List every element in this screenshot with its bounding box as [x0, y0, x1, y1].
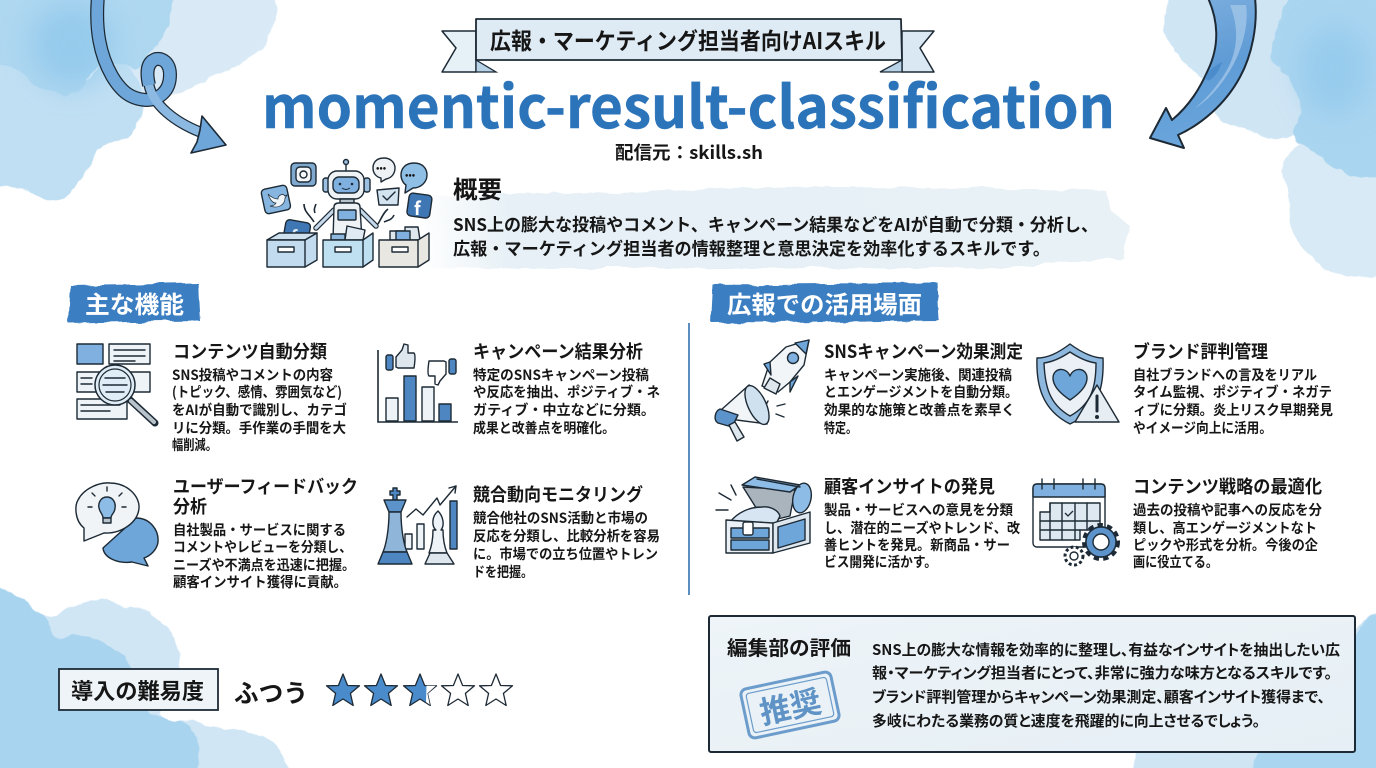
icon: robot sorting social media into boxes [261, 158, 432, 267]
review heading: 編集部の評価 [727, 632, 851, 661]
use case text: 効果的な施策と改善点を素早く [824, 400, 1015, 420]
icon: calendar with gears [1033, 479, 1117, 565]
overview text [453, 212, 1098, 261]
feature text: コメントやレビューを分類し、 [173, 537, 352, 557]
feature text [473, 508, 660, 582]
source line: 配信元：skills.sh [615, 139, 763, 165]
use case title: ブランド評判管理 [1133, 338, 1268, 364]
star rating [326, 674, 512, 706]
feature: content classification [77, 338, 347, 455]
feature text: リに分類。手作業の手間を大 [172, 418, 346, 438]
ribbon banner [442, 19, 934, 72]
feature text: SNS投稿やコメントの内容 [172, 365, 333, 385]
feature text: ニーズや不満点を迅速に把握。 [173, 555, 355, 575]
feature title: コンテンツ自動分類 [173, 338, 327, 364]
feature text: に。市場での立ち位置やトレン [473, 544, 658, 564]
use case text: 自社ブランドへの言及をリアル [1133, 365, 1317, 385]
icon: chess pieces and rising chart [378, 486, 457, 564]
feature text: 特定のSNSキャンペーン投稿 [473, 365, 649, 385]
use case text: ピックや形式を分析。今後の企 [1133, 535, 1318, 555]
use case title: コンテンツ戦略の最適化 [1133, 473, 1322, 499]
panel: overview [261, 158, 1130, 268]
review text: 多岐にわたる業務の質と速度を飛躍的に向上させるでしょう。 [872, 710, 1260, 731]
use case text: ィブに分類。炎上リスク早期発見 [1133, 400, 1333, 420]
use case text: 類し、高エンゲージメントなト [1133, 518, 1317, 538]
icon: shield with heart and warning [1037, 344, 1119, 424]
feature text: をAIが自動で識別し、カテゴ [172, 400, 347, 420]
icon: treasure chest [716, 477, 814, 553]
review text [872, 639, 1340, 731]
feature title: ユーザーフィードバック [173, 473, 358, 499]
panel: editorial review [709, 616, 1355, 752]
use case text: やイメージ向上に活用。 [1133, 418, 1272, 438]
review box [709, 616, 1355, 752]
feature text: 反応を分類し、比較分析を容易 [473, 526, 660, 546]
feature text: 成果と改善点を明確化。 [473, 418, 615, 438]
icon: magnifier over documents [77, 344, 155, 423]
use case text: タイム監視、ポジティブ・ネガテ [1133, 382, 1332, 402]
feature title: 分析 [173, 493, 207, 519]
panel: main features [68, 283, 660, 592]
feature text: 顧客インサイト獲得に貢献。 [173, 572, 347, 592]
feature: user feedback [76, 473, 358, 592]
ribbon banner: 広報・マーケティング担当者向けAIスキル [490, 22, 886, 56]
use case: campaign measurement [715, 338, 1023, 441]
arrow: top right curve [1150, 0, 1256, 148]
review text: SNS上の膨大な情報を効率的に整理し、有益なインサイトを抽出したい広 [872, 639, 1340, 660]
panel: PR use cases [711, 283, 1333, 572]
icon: robot sorting social media into boxes: f [291, 223, 298, 248]
feature title [173, 473, 358, 519]
icon: robot sorting social media into boxes: f [414, 195, 422, 221]
use case: brand reputation [1037, 338, 1333, 438]
heading: PR use cases: 広報での活用場面 [727, 285, 922, 320]
feature title: 競合動向モニタリング [473, 481, 643, 507]
panel: difficulty [59, 669, 512, 710]
use case text: 製品・サービスへの意見を分類 [824, 500, 1013, 520]
use case text: し、潜在的ニーズやトレンド、改 [824, 518, 1020, 538]
use case title: 顧客インサイトの発見 [824, 473, 995, 499]
feature text: ガティブ・中立などに分類。 [473, 400, 655, 420]
icon: bar chart with thumbs [378, 344, 458, 422]
divider [688, 323, 690, 595]
use case text: 画に役立てる。 [1133, 552, 1218, 572]
use case: content strategy [1033, 473, 1322, 572]
use case text [824, 365, 1018, 438]
icon: robot sorting social media into boxes: ••• [405, 168, 415, 181]
overview wash band [425, 186, 1130, 268]
recommended stamp: 推奨 [755, 676, 825, 733]
use case text [1133, 500, 1322, 572]
feature text: (トピック、感情、雰囲気など) [172, 382, 342, 402]
difficulty value: ふつう [234, 674, 308, 710]
icon: speech bubbles with bulb [76, 483, 158, 566]
feature text [172, 365, 347, 455]
feature text: 自社製品・サービスに関する [173, 520, 346, 540]
difficulty label: 導入の難易度 [71, 674, 204, 706]
heading: main features [68, 283, 200, 323]
use case text: 過去の投稿や記事への反応を分 [1133, 500, 1322, 520]
use case text [824, 500, 1020, 572]
icon: robot sorting social media into boxes: ••• [376, 161, 386, 174]
use case text [1133, 365, 1333, 438]
use case text: ビス開発に活かす。 [824, 552, 937, 572]
heading: main features: 主な機能 [85, 285, 184, 320]
recommended stamp [740, 671, 840, 739]
feature: campaign analysis [378, 338, 660, 438]
feature text: ドを把握。 [473, 562, 533, 582]
review text: 報・マーケティング担当者にとって、非常に強力な味方となるスキルです。 [872, 662, 1332, 683]
feature text: や反応を抽出、ポジティブ・ネ [473, 382, 660, 402]
use case text: キャンペーン実施後、関連投稿 [824, 365, 1012, 385]
use case text: とエンゲージメントを自動分類。 [824, 382, 1018, 402]
use case text: 善ヒントを発見。新商品・サー [824, 535, 1010, 555]
overview heading: 概要 [453, 170, 502, 205]
use case: customer insight [716, 473, 1020, 572]
feature: competitor monitoring [378, 481, 660, 582]
feature text [173, 520, 355, 592]
feature text: 幅削減。 [172, 435, 217, 455]
use case title: SNSキャンペーン効果測定 [824, 338, 1023, 364]
title: momentic-result-classification [262, 61, 1115, 145]
feature text: 競合他社のSNS活動と市場の [473, 508, 648, 528]
arrow: top left swirl [97, 0, 226, 153]
feature text [473, 365, 660, 438]
feature title: キャンペーン結果分析 [473, 338, 643, 364]
overview text: 広報・マーケティング担当者の情報整理と意思決定を効率化するスキルです。 [453, 236, 1050, 261]
difficulty label [59, 669, 218, 710]
icon: rocket and megaphone [715, 340, 809, 441]
overview text: SNS上の膨大な投稿やコメント、キャンペーン結果などをAIが自動で分類・分析し、 [453, 212, 1098, 237]
use case text: 特定。 [824, 418, 857, 438]
review text: ブランド評判管理からキャンペーン効果測定、顧客インサイト獲得まで、 [872, 686, 1325, 707]
